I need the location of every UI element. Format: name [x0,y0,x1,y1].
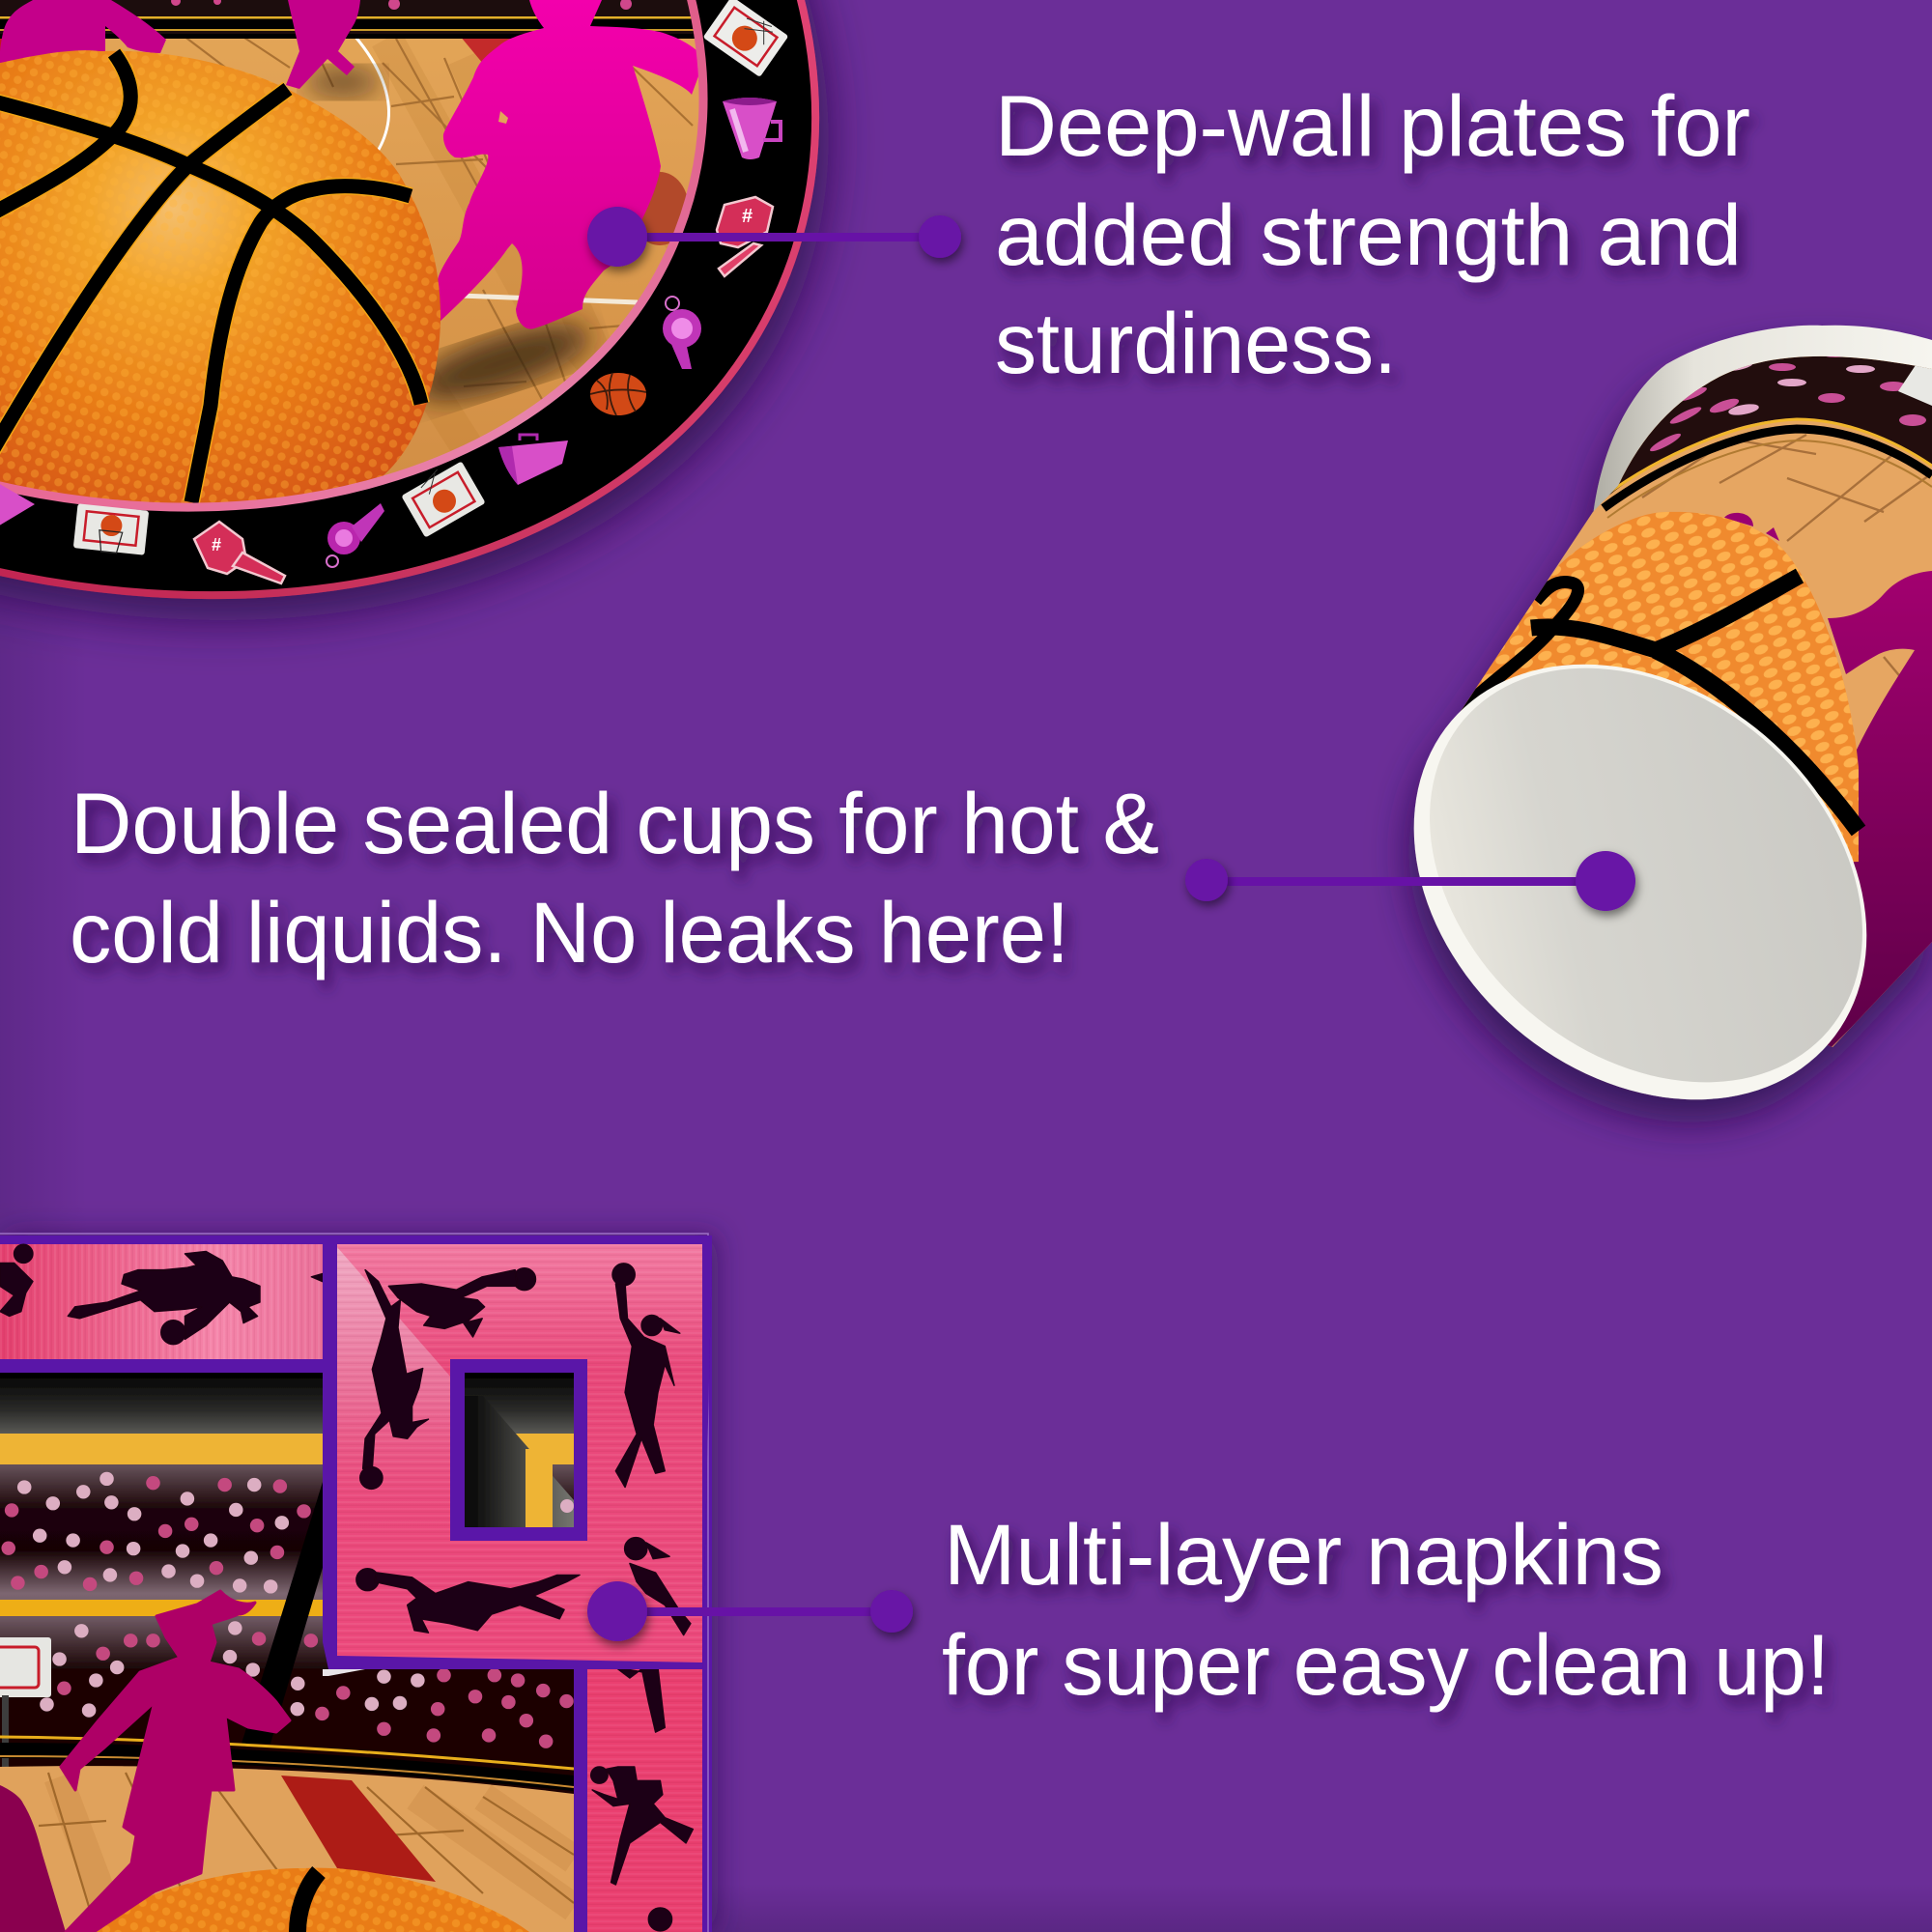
player silhouette: lower right column [591,1767,693,1885]
small ball behind player [641,172,686,245]
fold purple frame [323,1236,712,1669]
icon: foam finger bottom [194,522,285,583]
silhouettes on bands (behind fold) [0,1244,693,1931]
floor [0,1766,574,1932]
player silhouette: top band [68,1251,260,1345]
stands background [0,1373,574,1798]
basketball [0,50,440,512]
fold pink surface [337,1244,702,1662]
icon: hoop tile left [73,503,149,556]
pole [242,1466,353,1744]
text: cups [70,775,1159,980]
player silhouette: band right end [311,1272,330,1321]
icon: cup [723,98,781,159]
background players [0,0,360,89]
ball: lower right column [648,1908,672,1931]
court scene under napkin [0,1373,574,1932]
text: cups: cold liquids. No leaks here! [70,884,1069,980]
top printed band [0,1244,333,1359]
yellow stripes [0,1434,574,1464]
gap in player silhouette [498,111,508,124]
icon: foam finger bottom: # [212,535,221,554]
cup body [1430,328,1932,1101]
panel: cup illustration [1386,325,1932,1146]
text: plates [995,77,1750,391]
icon: hoop tile top right [703,0,788,77]
player: right column [612,1264,680,1487]
right printed column [587,1642,702,1932]
connector: cup callout [1185,851,1635,911]
player: fold upper [388,1268,535,1337]
connector: napkin callout [587,1581,913,1641]
cup player silhouette [1797,571,1932,1063]
floor plank lines [39,1773,574,1932]
player silhouette: left edge of band [0,1244,33,1316]
napkin folded corner [323,1236,712,1676]
fold lower-left lighter layer [337,1244,702,1662]
pink player silhouette [438,0,705,329]
icon: whistle bottom [327,503,384,567]
cup hand fragments [1724,513,1779,541]
icon: basketball [590,373,646,415]
text: plates: added strength and [995,186,1742,283]
cup basketball [1439,512,1859,869]
cup seams [1452,576,1859,831]
cup tile fragment [1898,362,1932,406]
fold silhouettes [356,1264,691,1635]
text: plates: sturdiness. [995,295,1397,391]
cup stands band [1584,356,1932,512]
icon: hoop tile bottom [399,457,486,538]
window: folded-under layer [465,1396,604,1536]
red court stripe [281,1776,436,1882]
bottom basketball [89,1868,529,1932]
cup rim [1593,326,1932,517]
napkin light edge [0,1234,708,1932]
floor plank bands [58,1777,574,1932]
icon: megaphone right [498,435,568,485]
text: napkins: for super easy clean up! [942,1616,1830,1713]
hoop backboard [0,1637,51,1768]
court floor [0,39,699,476]
court arc lines [0,1737,574,1769]
connector: plate callout [587,207,961,267]
panel: napkin illustration [0,1234,712,1932]
napkin base border [0,1236,712,1932]
plate centre scene [0,0,734,531]
cup crowd dots [1648,352,1926,454]
dark player fragment [0,1785,66,1932]
icon: foam finger right: # [742,206,753,227]
text: napkins [942,1506,1830,1713]
icon: whistle right [663,297,701,369]
cup base [1326,575,1932,1189]
icon: foam finger right [717,197,773,276]
plate inner rim [0,0,857,691]
magenta player [61,1591,290,1932]
plate outer rim and dark band [0,0,995,810]
window: inner purple edge [450,1359,587,1541]
text: cups: Double sealed cups for hot & [71,775,1159,871]
player: fold bottom [356,1569,580,1633]
text: napkins: Multi-layer napkins [944,1506,1663,1603]
panel: plate illustration [0,0,853,644]
player: right column lower [625,1538,691,1635]
cup arc lines [1604,419,1932,497]
stands top band [0,0,734,39]
player: fold left [360,1270,429,1489]
text: plates: Deep-wall plates for [995,77,1750,174]
player legs: under fold [615,1667,665,1732]
crowd dots [1,1472,574,1748]
icon: megaphone left [0,475,35,533]
fold white underside [323,1669,365,1676]
